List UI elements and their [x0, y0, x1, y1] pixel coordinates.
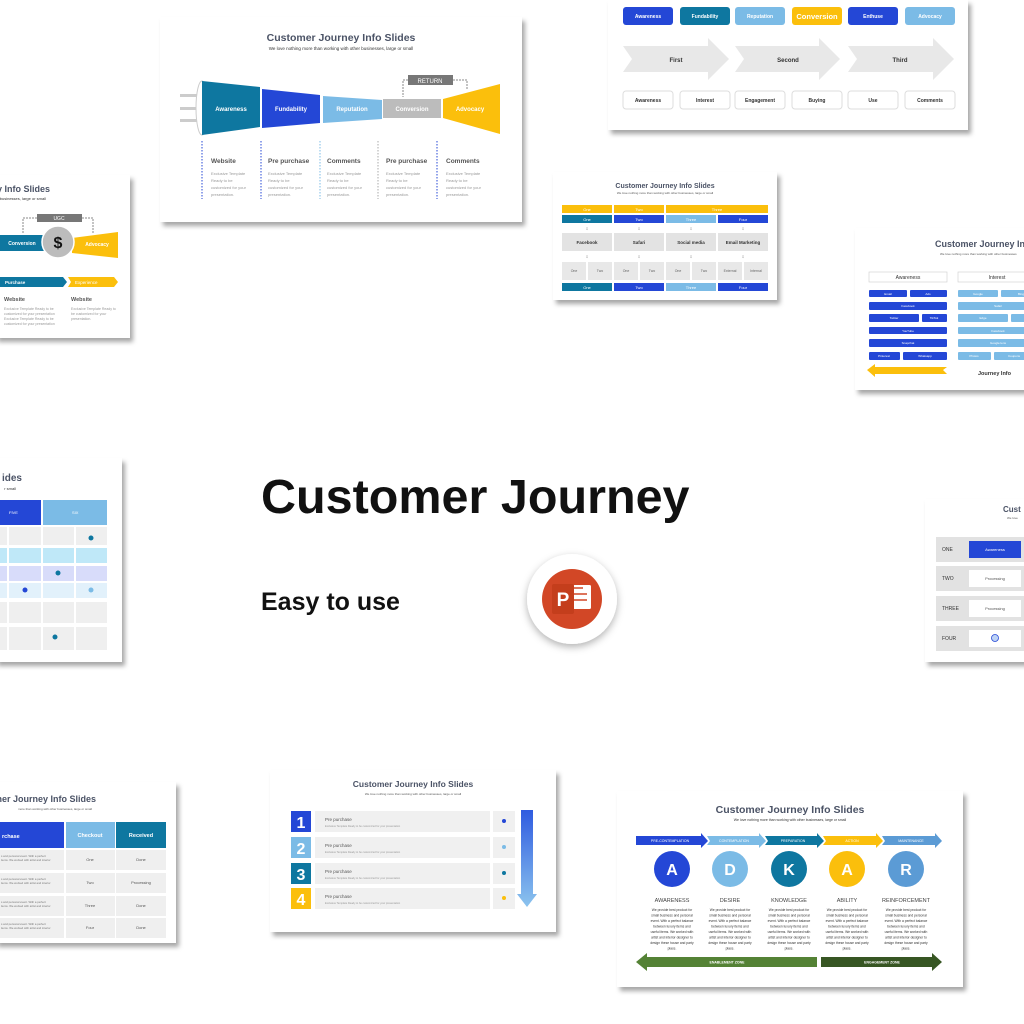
- icon: powerpoint: [527, 554, 617, 644]
- panel: channel table slide: ⇩: [741, 254, 745, 259]
- panel: channel table slide: Customer Journey Info Slides: [615, 183, 715, 190]
- panel: ADKAR slide: design these house and party: [650, 941, 694, 945]
- panel: ADKAR slide: design these house and party: [708, 941, 752, 945]
- panel: funnel slide: [160, 17, 522, 222]
- panel: purchase table slide: Three: [85, 903, 96, 908]
- panel: channel table slide: ⇩: [585, 226, 589, 231]
- panel: ADKAR slide: PRE-CONTEMPLATION: [651, 839, 690, 843]
- panel: channels slide: Whatsapp: [918, 354, 932, 358]
- panel: funnel slide: Exclusive Template: [211, 171, 246, 176]
- panel: channel table slide: We love nothing more than working with other businesses, large or small: [617, 191, 713, 195]
- panel: numbered list slide: Pre purchase: [325, 843, 352, 848]
- panel: ADKAR slide: We provide best product for: [652, 908, 693, 912]
- panel: step rows slide: Processing: [985, 606, 1005, 611]
- panel: channels slide: TikTok: [930, 316, 939, 320]
- panel: ADKAR slide: ACTION: [845, 839, 859, 843]
- panel: ADKAR slide: [617, 791, 963, 987]
- panel: UGC slide: presentation.: [71, 317, 91, 321]
- panel: channel table slide: ⇩: [637, 226, 641, 231]
- panel: channel table slide: Three: [686, 285, 697, 290]
- panel: purchase table slide: One: [86, 857, 95, 862]
- panel: stages with arrows slide: Third: [892, 58, 908, 64]
- panel: stages with arrows slide: Awareness: [635, 14, 661, 20]
- panel: ADKAR slide: useful items. We worked with: [651, 930, 693, 934]
- panel: channel table slide: ⇩: [689, 226, 693, 231]
- panel: ADKAR slide: We love nothing more than working with other businesses, large or small: [734, 818, 846, 822]
- panel: channel table slide: External: [724, 269, 737, 273]
- panel: UGC slide: customized for your presentation: [4, 312, 55, 316]
- panel: purchase table slide: s and personal event. With a perfect: [1, 854, 46, 858]
- panel: purchase table slide: items. We worked with artist and interior: [1, 881, 51, 885]
- panel: numbered list slide: Pre purchase: [325, 869, 352, 874]
- panel: ADKAR slide: between luxury items and: [653, 924, 691, 928]
- panel: purchase table slide: Done: [136, 857, 147, 862]
- panel: channel table slide: One: [583, 207, 592, 212]
- panel: grid table slide: SIX: [72, 510, 79, 515]
- panel: UGC slide: [0, 175, 130, 338]
- panel: funnel slide: customized for your: [446, 185, 482, 190]
- panel: funnel slide: Exclusive Template: [386, 171, 421, 176]
- panel: ADKAR slide: between luxury items and: [887, 924, 925, 928]
- panel: stages with arrows slide: Conversion: [796, 12, 838, 21]
- panel: UGC slide: Exclusive Template Ready to be: [4, 317, 54, 321]
- panel: funnel slide: Ready to be: [446, 178, 468, 183]
- panel: step rows slide: ONE: [942, 547, 954, 553]
- panel: funnel slide: Conversion: [395, 107, 429, 113]
- panel: ADKAR slide: ENGAGEMENT ZONE: [864, 960, 901, 964]
- panel: ADKAR slide: useful items. We worked with: [885, 930, 927, 934]
- panel: ADKAR slide: We provide best product for: [886, 908, 927, 912]
- panel: funnel slide: RETURN: [418, 79, 442, 85]
- panel: purchase table slide: s and personal event. With a perfect: [1, 922, 46, 926]
- panel: numbered list slide: Customer Journey Info Slides: [353, 779, 473, 789]
- panel: channel table slide: Four: [739, 217, 748, 222]
- panel: ADKAR slide: event. With a perfect balance: [709, 919, 752, 923]
- panel: UGC slide: be customized for your: [71, 312, 107, 316]
- panel: ADKAR slide: event. With a perfect balance: [826, 919, 869, 923]
- panel: channel table slide: Two: [635, 207, 643, 212]
- panel: ADKAR slide: artist and interior designer to: [651, 936, 693, 940]
- panel: channel table slide: ⇩: [689, 254, 693, 259]
- panel: stages with arrows slide: Enthuse: [863, 14, 883, 20]
- panel: UGC slide: Advocacy: [85, 242, 109, 248]
- panel: funnel slide: Exclusive Template: [446, 171, 481, 176]
- panel: grid table slide: r small: [4, 486, 16, 491]
- panel: channel table slide: Safari: [633, 240, 645, 245]
- panel: channels slide: Bing: [1018, 292, 1024, 296]
- panel: channel table slide: [553, 172, 777, 300]
- panel: UGC slide: Conversion: [8, 241, 36, 247]
- panel: purchase table slide: s and personal event. With a perfect: [1, 900, 46, 904]
- panel: ADKAR slide: design these house and party: [825, 941, 869, 945]
- panel: UGC slide: customized for your presentation: [4, 322, 55, 326]
- panel: ADKAR slide: design these house and party: [884, 941, 928, 945]
- panel: ADKAR slide: artist and interior designer to: [709, 936, 751, 940]
- panel: stages with arrows slide: Reputation: [747, 14, 773, 20]
- panel: ADKAR slide: place.: [843, 946, 851, 950]
- panel: channels slide: Snapchat: [902, 341, 914, 345]
- panel: ADKAR slide: between luxury items and: [770, 924, 808, 928]
- panel: UGC slide: Website: [71, 297, 92, 303]
- panel: stages with arrows slide: Use: [868, 98, 878, 104]
- panel: ADKAR slide: MAINTENANCE: [898, 839, 924, 843]
- panel: numbered list slide: [270, 770, 556, 932]
- panel: UGC slide: Purchase: [5, 280, 26, 285]
- panel: numbered list slide: Pre purchase: [325, 817, 352, 822]
- panel: channels slide: Email: [884, 292, 892, 296]
- panel: ADKAR slide: place.: [902, 946, 910, 950]
- panel: channel table slide: One: [583, 285, 592, 290]
- panel: funnel slide: We love nothing more than working with other businesses, large or small: [269, 46, 413, 51]
- panel: channels slide: Interest: [989, 275, 1006, 281]
- panel: channel table slide: Two: [701, 269, 707, 273]
- panel: channels slide: Google lens: [990, 341, 1007, 345]
- panel: funnel slide: customized for your: [268, 185, 304, 190]
- panel: funnel slide: Exclusive Template: [268, 171, 303, 176]
- panel: funnel slide: Reputation: [336, 107, 368, 113]
- panel: channels slide: Facebook: [901, 304, 915, 308]
- panel: funnel slide: Ready to be: [211, 178, 233, 183]
- panel: numbered list slide: Exclusive Template Ready to be customized for your presentation: [325, 824, 401, 828]
- panel: purchase table slide: rchase: [2, 834, 20, 840]
- panel: ADKAR slide: We provide best product for: [769, 908, 810, 912]
- panel: ADKAR slide: CONTEMPLATION: [719, 839, 749, 843]
- panel: ADKAR slide: place.: [668, 946, 676, 950]
- panel: funnel slide: Ready to be: [268, 178, 290, 183]
- panel: channel table slide: Two: [635, 217, 643, 222]
- panel: channels slide: Pinterest: [878, 354, 890, 358]
- panel: channel table slide: ⇩: [637, 254, 641, 259]
- panel: funnel slide: Pre purchase: [268, 158, 310, 165]
- panel: ADKAR slide: Customer Journey Info Slides: [716, 804, 865, 816]
- panel: step rows slide: Cust: [1003, 505, 1021, 514]
- panel: ADKAR slide: R: [900, 862, 912, 879]
- panel: purchase table slide: Done: [136, 925, 147, 930]
- panel: ADKAR slide: artist and interior designer to: [885, 936, 927, 940]
- panel: channel table slide: One: [583, 217, 592, 222]
- panel: purchase table slide: Checkout: [77, 833, 103, 839]
- panel: channels slide: We love nothing more than working with other businesses: [940, 252, 1017, 256]
- panel: ADKAR slide: We provide best product for: [827, 908, 868, 912]
- panel: funnel slide: presentation.: [211, 192, 234, 197]
- panel: purchase table slide: s and personal event. With a perfect: [1, 877, 46, 881]
- panel: channel table slide: One: [675, 269, 681, 273]
- panel: funnel slide: presentation.: [386, 192, 409, 197]
- panel: ADKAR slide: between luxury items and: [828, 924, 866, 928]
- panel: stages with arrows slide: Comments: [917, 98, 943, 104]
- panel: funnel slide: presentation.: [268, 192, 291, 197]
- panel: funnel slide: Exclusive Template: [327, 171, 362, 176]
- panel: funnel slide: Pre purchase: [386, 158, 428, 165]
- panel: channels slide: Google: [973, 292, 983, 296]
- panel: channel table slide: Three: [686, 217, 697, 222]
- panel: purchase table slide: more than working with other businesses, large or small: [18, 807, 92, 811]
- panel: numbered list slide: Exclusive Template Ready to be customized for your presentation: [325, 850, 401, 854]
- panel: channel table slide: One: [571, 269, 577, 273]
- panel: channel table slide: ⇩: [585, 254, 589, 259]
- panel: purchase table slide: items. We worked with artist and interior: [1, 926, 51, 930]
- panel: step rows slide: Awareness: [985, 547, 1005, 552]
- panel: ADKAR slide: place.: [726, 946, 734, 950]
- panel: ADKAR slide: small business and personal: [768, 914, 810, 918]
- panel: ADKAR slide: A: [666, 862, 678, 879]
- panel: channels slide: Twitter: [890, 316, 898, 320]
- panel: ADKAR slide: DESIRE: [720, 898, 741, 904]
- panel: ADKAR slide: A: [841, 862, 853, 879]
- panel: channels slide: YouTube: [902, 329, 914, 333]
- panel: purchase table slide: Received: [129, 833, 153, 839]
- panel: ADKAR slide: small business and personal: [709, 914, 751, 918]
- panel: grid table slide: [0, 458, 122, 662]
- panel: ADKAR slide: small business and personal: [651, 914, 693, 918]
- panel: funnel slide: customized for your: [327, 185, 363, 190]
- panel: stages with arrows slide: First: [669, 58, 683, 64]
- panel: ADKAR slide: artist and interior designer to: [826, 936, 868, 940]
- panel: ADKAR slide: K: [783, 862, 795, 879]
- panel: stages with arrows slide: Buying: [809, 98, 825, 104]
- panel: stages with arrows slide: Awareness: [635, 98, 661, 104]
- panel: step rows slide: TWO: [942, 576, 954, 582]
- panel: funnel slide: presentation.: [327, 192, 350, 197]
- panel: stages with arrows slide: Fundability: [692, 14, 719, 20]
- panel: channels slide: Safari: [994, 304, 1002, 308]
- panel: UGC slide: UGC: [53, 216, 65, 222]
- panel: ADKAR slide: PREPARATION: [781, 839, 806, 843]
- panel: ADKAR slide: place.: [785, 946, 793, 950]
- panel: purchase table slide: Done: [136, 903, 147, 908]
- subtitle: easy to use: Easy to use: [261, 588, 400, 616]
- panel: ADKAR slide: small business and personal: [885, 914, 927, 918]
- panel: UGC slide: Experience: [75, 280, 98, 285]
- panel: funnel slide: customized for your: [211, 185, 247, 190]
- panel: ADKAR slide: artist and interior designer to: [768, 936, 810, 940]
- panel: channels slide: Facebook: [991, 329, 1005, 333]
- panel: ADKAR slide: D: [724, 862, 736, 879]
- panel: funnel slide: Customer Journey Info Slides: [267, 32, 416, 44]
- panel: UGC slide: $: [54, 235, 63, 252]
- panel: ADKAR slide: KNOWLEDGE: [771, 898, 807, 904]
- title: Customer Journey: [261, 470, 690, 524]
- panel: purchase table slide: Processing: [131, 880, 151, 885]
- panel: step rows slide: THREE: [942, 606, 960, 612]
- panel: purchase table slide: items. We worked with artist and interior: [1, 904, 51, 908]
- panel: ADKAR slide: REINFORCEMENT: [882, 898, 931, 904]
- panel: funnel slide: Ready to be: [327, 178, 349, 183]
- panel: step rows slide: We love: [1007, 516, 1018, 520]
- panel: numbered list slide: 2: [297, 841, 306, 858]
- panel: funnel slide: Website: [211, 158, 236, 165]
- panel: channels slide: Edge: [979, 316, 987, 320]
- panel: ADKAR slide: AWARENESS: [655, 898, 690, 904]
- panel: ADKAR slide: event. With a perfect balance: [885, 919, 928, 923]
- panel: stages with arrows slide: Advocacy: [918, 14, 942, 20]
- panel: step rows slide: [925, 499, 1024, 662]
- panel: numbered list slide: Exclusive Template Ready to be customized for your presentation: [325, 901, 401, 905]
- panel: step rows slide: Processing: [985, 576, 1005, 581]
- panel: stages with arrows slide: Interest: [696, 98, 714, 104]
- panel: stages with arrows slide: Second: [777, 58, 799, 64]
- panel: stages with arrows slide: Engagement: [745, 98, 775, 104]
- panel: stages with arrows slide: [608, 0, 968, 130]
- panel: ADKAR slide: event. With a perfect balance: [768, 919, 811, 923]
- panel: step rows slide: FOUR: [942, 636, 957, 642]
- panel: channels slide: Coupons: [1008, 354, 1021, 358]
- panel: grid table slide: ides: [2, 473, 22, 484]
- panel: channel table slide: Facebook: [576, 240, 598, 245]
- panel: channel table slide: ⇩: [741, 226, 745, 231]
- panel: UGC slide: Exclusive Template Ready to: [71, 307, 116, 311]
- panel: channel table slide: Three: [712, 207, 723, 212]
- panel: funnel slide: Fundability: [275, 107, 308, 113]
- panel: channel table slide: Four: [739, 285, 748, 290]
- panel: numbered list slide: 4: [297, 892, 306, 909]
- panel: ADKAR slide: We provide best product for: [710, 908, 751, 912]
- panel: funnel slide: presentation.: [446, 192, 469, 197]
- panel: UGC slide: Exclusive Template Ready to be: [4, 307, 54, 311]
- panel: channels slide: Awareness: [896, 275, 921, 281]
- panel: channel table slide: Two: [597, 269, 603, 273]
- panel: numbered list slide: 3: [297, 867, 306, 884]
- panel: numbered list slide: Pre purchase: [325, 894, 352, 899]
- panel: ADKAR slide: ENABLEMENT ZONE: [710, 960, 745, 964]
- icon: powerpoint: P: [557, 590, 570, 611]
- panel: channel table slide: One: [623, 269, 629, 273]
- panel: funnel slide: Awareness: [215, 107, 247, 113]
- panel: numbered list slide: Exclusive Template Ready to be customized for your presentation: [325, 876, 401, 880]
- panel: channels slide: [855, 228, 1024, 390]
- panel: ADKAR slide: between luxury items and: [711, 924, 749, 928]
- panel: ADKAR slide: small business and personal: [826, 914, 868, 918]
- panel: ADKAR slide: useful items. We worked with: [768, 930, 810, 934]
- panel: channel table slide: Social media: [677, 240, 705, 245]
- panel: grid table slide: FIVE: [9, 510, 18, 515]
- panel: channels slide: Journey Info: [978, 371, 1012, 377]
- panel: ADKAR slide: useful items. We worked with: [709, 930, 751, 934]
- panel: ADKAR slide: useful items. We worked with: [826, 930, 868, 934]
- panel: numbered list slide: We love nothing more than working with other businesses, large or small: [365, 792, 461, 796]
- panel: funnel slide: Comments: [327, 158, 361, 165]
- panel: channels slide: Ads: [925, 292, 931, 296]
- panel: purchase table slide: [0, 782, 176, 943]
- panel: purchase table slide: items. We worked with artist and interior: [1, 858, 51, 862]
- panel: channel table slide: Email Marketing: [726, 240, 761, 245]
- panel: ADKAR slide: ABILITY: [837, 898, 858, 904]
- panel: ADKAR slide: event. With a perfect balance: [651, 919, 694, 923]
- panel: channel table slide: Two: [649, 269, 655, 273]
- panel: ADKAR slide: design these house and party: [767, 941, 811, 945]
- panel: funnel slide: Advocacy: [456, 107, 485, 113]
- panel: channels slide: Photos: [969, 354, 979, 358]
- panel: funnel slide: Ready to be: [386, 178, 408, 183]
- panel: purchase table slide: Two: [86, 880, 94, 885]
- panel: channel table slide: Two: [635, 285, 643, 290]
- panel: UGC slide: Website: [4, 297, 25, 303]
- panel: channel table slide: Internal: [750, 269, 762, 273]
- panel: funnel slide: Comments: [446, 158, 480, 165]
- panel: purchase table slide: Four: [86, 925, 95, 930]
- panel: funnel slide: customized for your: [386, 185, 422, 190]
- panel: numbered list slide: 1: [297, 815, 306, 832]
